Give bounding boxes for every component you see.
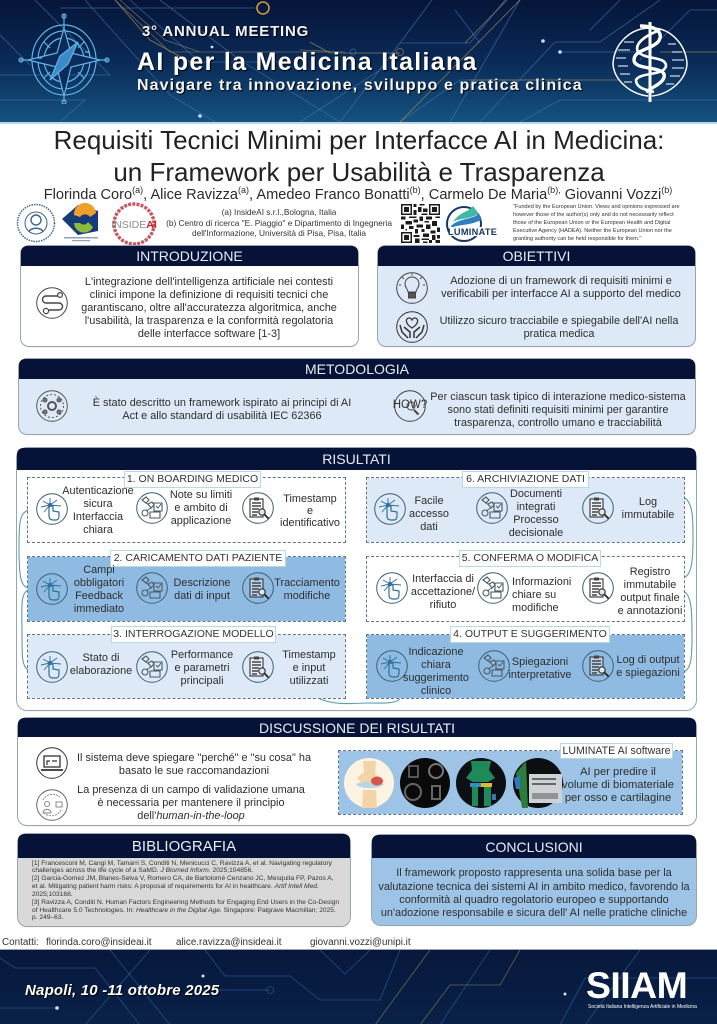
funding disclaimer: those of the European Union or the European Health and Digital bbox=[513, 220, 670, 226]
step 6 text c bbox=[622, 496, 674, 522]
meeting label: 3° ANNUAL MEETING bbox=[142, 23, 309, 40]
conclusion text: Il framework proposto rappresenta una solida base per la bbox=[396, 867, 672, 879]
discussion text 2 bbox=[77, 784, 305, 822]
footer banner bbox=[0, 949, 717, 1024]
panel: introduzione bbox=[21, 246, 358, 346]
step 1 text c: Timestamp bbox=[283, 492, 337, 504]
step 4 text a: suggerimento bbox=[403, 672, 469, 684]
software description: AI per predire il bbox=[580, 766, 656, 778]
panel: risultati bbox=[17, 448, 696, 710]
intro text: garantiscano, oltre all'accuratezza algoritmica, anche bbox=[81, 302, 337, 314]
references: et al. Mitigating patient harm risks: A proposal of requirements for AI in healthcare. Artif Intell Med. bbox=[32, 883, 319, 890]
step 1 text b: e ambito di bbox=[174, 502, 228, 514]
references: [3] Ravizza A, Conditi N. Human Factors Engineering Methods for Engaging End Users in the Co-Design bbox=[32, 899, 339, 906]
3D segmented model bbox=[456, 758, 506, 808]
logo: research centre bbox=[62, 203, 98, 242]
main title: Requisiti Tecnici Minimi per Interfacce AI in Medicina: bbox=[54, 125, 664, 155]
step 6 text b: integrati bbox=[517, 500, 555, 512]
icon: flow bbox=[477, 572, 509, 604]
method text 1: È stato descritto un framework ispirato ai principi di AI bbox=[93, 396, 351, 408]
software description: volume di biomateriale bbox=[562, 778, 674, 790]
objective 2 text: pratica medica bbox=[524, 328, 594, 340]
step 6 label: 6. ARCHIVIAZIONE DATI bbox=[466, 473, 585, 485]
references bbox=[32, 860, 339, 922]
step 5 text c: e annotazioni bbox=[618, 604, 682, 616]
method text 2: trasparenza, controllo umano e tracciabilità bbox=[454, 416, 662, 428]
step 1 text c: identificativo bbox=[280, 516, 340, 528]
funding disclaimer bbox=[513, 204, 680, 242]
step 5 text b: modifiche bbox=[512, 602, 559, 614]
affiliations: dell'Informazione, Università di Pisa, Pisa, Italia bbox=[192, 228, 366, 238]
heading: discussione: DISCUSSIONE DEI RISULTATI bbox=[259, 720, 455, 736]
discussion text 2: è necessaria per mantenere il principio bbox=[97, 796, 285, 808]
step 4 label: 4. OUTPUT E SUGGERIMENTO bbox=[453, 628, 607, 640]
icon: pathway bbox=[36, 287, 68, 319]
step 4 text a: chiara bbox=[421, 658, 451, 670]
icon: touch bbox=[36, 573, 68, 605]
icon: flow bbox=[476, 492, 508, 524]
step 2 text a: immediato bbox=[74, 602, 124, 614]
funding disclaimer: however those of the author(s) only and do not necessarily reflect bbox=[513, 212, 674, 218]
references: challenges across the life cycle of a SaMD. J Biomed Inform. 2025;104856. bbox=[32, 867, 253, 874]
references: [1] Francesconi M, Cangi M, Tamarri S, Conditi N, Menicucci C, Ravizza A, et al. Navigating regulatory bbox=[32, 860, 332, 866]
step 3 text c: Timestamp bbox=[282, 648, 336, 660]
icon: hands and heart bbox=[396, 311, 428, 343]
contacts: alice.ravizza@insideai.it bbox=[176, 937, 282, 948]
step 5 text c: Registro bbox=[630, 566, 670, 578]
step 3 text b: principali bbox=[181, 674, 223, 686]
software label: LUMINATE AI software bbox=[562, 745, 671, 757]
step 2 text b bbox=[174, 576, 230, 602]
contacts: Contatti: bbox=[2, 937, 39, 948]
step 3 text b bbox=[171, 648, 233, 686]
authors: Florinda Coro(a), Alice Ravizza(a), Amedeo Franco Bonatti(b), Carmelo De Maria(b), Giovanni Vozzi(b) bbox=[44, 185, 672, 203]
discussion text 1: Il sistema deve spiegare "perché" e "su cosa" ha bbox=[77, 752, 311, 764]
conclusion text: conformità al quadro regolatorio europeo e supportando bbox=[399, 894, 669, 906]
heading: risultati bbox=[17, 448, 696, 470]
step 4 text a: Indicazione bbox=[408, 646, 464, 658]
step 6 text b: Processo bbox=[513, 514, 559, 526]
step 4 text b: interpretative bbox=[509, 668, 571, 680]
logo: university seal bbox=[16, 204, 56, 242]
intro text: clinici impone la definizione di requisiti tecnici che bbox=[90, 288, 328, 300]
step 6 text a: dati bbox=[420, 520, 438, 532]
step 2 text c: modifiche bbox=[284, 590, 330, 602]
heading: metodologia bbox=[19, 359, 695, 379]
heading: introduzione: INTRODUZIONE bbox=[136, 248, 243, 264]
icon: flow bbox=[136, 651, 168, 683]
step 5 text a bbox=[411, 572, 475, 612]
intro text: L'integrazione dell'intelligenza artificiale nei contesti bbox=[85, 276, 333, 288]
heading: conclusioni bbox=[372, 835, 696, 858]
objective 1 text: verificabili per interfacce AI a supporto del medico bbox=[441, 288, 681, 300]
icon: light bulb bbox=[396, 272, 428, 304]
CT scan bbox=[400, 758, 450, 808]
step 2 text a: obbligatori bbox=[74, 576, 124, 588]
SIIAM tagline: Società Italiana Intelligenza Artificiale in Medicina bbox=[588, 1004, 697, 1010]
icon: laptop bbox=[36, 747, 68, 779]
logo: Luminate: LUMINATE bbox=[448, 227, 497, 237]
intro text bbox=[81, 276, 337, 340]
discussion text 1 bbox=[77, 752, 311, 778]
icon: flow bbox=[478, 650, 510, 682]
step 2 text c: Tracciamento bbox=[274, 576, 340, 588]
step 4 text b: Spiegazioni bbox=[512, 656, 568, 668]
references: 2025;103168. bbox=[32, 891, 73, 898]
step 1 text a bbox=[62, 484, 134, 536]
heading: metodologia: METODOLOGIA bbox=[305, 361, 409, 377]
logo: Luminate bbox=[446, 206, 497, 242]
method text 1: Act e allo standard di usabilità IEC 62366 bbox=[122, 410, 322, 422]
step 1 text c: e bbox=[307, 504, 313, 516]
conclusion text bbox=[378, 867, 690, 920]
icon: flow bbox=[136, 492, 168, 524]
discussion text 1: basato le sue raccomandazioni bbox=[119, 764, 269, 776]
panel: conclusioni bbox=[372, 835, 696, 925]
heading: conclusioni: CONCLUSIONI bbox=[485, 839, 583, 855]
step 1 text b bbox=[170, 488, 232, 526]
luminate software panel bbox=[339, 751, 682, 814]
icon: compass logo bbox=[18, 13, 110, 104]
icon: document bbox=[242, 572, 274, 604]
step 5 text b bbox=[512, 576, 571, 614]
step 3 text b: Performance bbox=[171, 648, 233, 660]
header circuit lines bbox=[0, 0, 717, 122]
funding disclaimer: granting authority can be held responsible for them." bbox=[513, 236, 641, 242]
panel: obiettivi bbox=[378, 246, 695, 346]
step 5 text c bbox=[618, 566, 682, 618]
method text 1 bbox=[93, 396, 351, 422]
logo: InsideAI: INSIDEAI bbox=[111, 219, 157, 231]
icon: document bbox=[582, 650, 614, 682]
icon: document bbox=[242, 651, 274, 683]
references: [2] Garcia-Gomez JM, Blanes-Selva V, Romero CA, de Bartolomé Cenzano JC, Mesquita FP, Pazos A, bbox=[32, 875, 334, 882]
icon: document bbox=[582, 492, 614, 524]
icon: touch bbox=[374, 493, 406, 525]
volume result view bbox=[512, 758, 564, 808]
objective 2 text: Utilizzo sicuro tracciabile e spiegabile dell'AI nella bbox=[440, 314, 678, 326]
icon: how magnifier: HOW? bbox=[393, 399, 427, 411]
objective 1 text: Adozione di un framework di requisiti minimi e bbox=[450, 274, 672, 286]
conclusion text: un'adozione responsabile e sicura dell' AI nelle pratiche cliniche bbox=[381, 907, 687, 919]
software description bbox=[562, 766, 674, 804]
step 4 text c bbox=[616, 654, 680, 680]
step 4: output e suggerimento bbox=[367, 635, 684, 698]
step 1 text c bbox=[280, 492, 340, 528]
step 1 label: 1. ON BOARDING MEDICO bbox=[127, 473, 258, 485]
panel: metodologia bbox=[19, 359, 695, 434]
step 6 text b bbox=[509, 488, 563, 540]
SIIAM logo bbox=[586, 967, 691, 1011]
icon: touch bbox=[376, 572, 408, 604]
step 5 text a: accettazione/ bbox=[411, 586, 475, 598]
step 1 text b: Note su limiti bbox=[170, 488, 232, 500]
intro text: l'usabilità, la trasparenza e la conformità regolatoria bbox=[85, 314, 333, 326]
heading: obiettivi bbox=[378, 246, 695, 266]
heading: risultati: RISULTATI bbox=[322, 451, 391, 467]
logo: InsideAI bbox=[111, 202, 157, 245]
header banner bbox=[0, 0, 717, 124]
icon: touch bbox=[36, 493, 68, 525]
step 3 text c: utilizzati bbox=[290, 674, 328, 686]
step 5 text b: Informazioni bbox=[512, 576, 571, 588]
contacts: florinda.coro@insideai.it bbox=[46, 937, 152, 948]
step 2: caricamento dati paziente bbox=[28, 557, 345, 621]
method text 2: Per ciascun task tipico di interazione medico-sistema bbox=[430, 390, 686, 402]
step 6 text c: Log bbox=[639, 496, 657, 508]
step 1 text a: sicura bbox=[83, 498, 113, 510]
icon: document bbox=[582, 572, 614, 604]
main title bbox=[54, 125, 664, 187]
step 3 text a: Stato di bbox=[83, 652, 119, 664]
step 4 text a bbox=[403, 646, 469, 698]
heading: introduzione bbox=[21, 246, 358, 266]
step 5 text c: output finale bbox=[620, 592, 680, 604]
step 5 text a: rifiuto bbox=[430, 598, 456, 610]
icon: gears bbox=[36, 390, 68, 422]
step 1 text a: Interfaccia bbox=[73, 510, 123, 522]
conference subtitle: Navigare tra innovazione, sviluppo e pratica clinica bbox=[137, 77, 583, 94]
step 3 text a bbox=[70, 652, 132, 676]
step 4 text b bbox=[509, 656, 571, 682]
icon: document bbox=[242, 492, 274, 524]
funding disclaimer: "Funded by the European Union. Views and opinions expressed are bbox=[513, 204, 680, 210]
step 6 text b: decisionale bbox=[509, 526, 563, 538]
step 4 text c: Log di output bbox=[617, 654, 679, 666]
step 6: archiviazione dati bbox=[367, 478, 684, 542]
knee illustration bbox=[344, 758, 394, 808]
icon: caduceus logo bbox=[612, 22, 688, 102]
heading: bibliografia: BIBLIOGRAFIA bbox=[132, 838, 236, 855]
step 2 label: 2. CARICAMENTO DATI PAZIENTE bbox=[114, 552, 282, 564]
heading: obiettivi: OBIETTIVI bbox=[503, 248, 570, 264]
objective 1 text bbox=[441, 274, 681, 300]
footer circuit lines bbox=[0, 950, 717, 1024]
QR code bbox=[401, 204, 440, 243]
heading: bibliografia bbox=[18, 834, 350, 858]
conference title: AI per la Medicina Italiana bbox=[137, 48, 478, 76]
panel: discussione dei risultati bbox=[18, 718, 696, 825]
step 3 text c bbox=[282, 648, 336, 688]
icon: touch bbox=[376, 650, 408, 682]
funding disclaimer: Executive Agency (HADEA). Neither the European Union nor the bbox=[513, 228, 672, 234]
conclusion text: valutazione tecnica dei sistemi AI in ambito medico, favorendo la bbox=[378, 881, 690, 893]
date and place: Napoli, 10 -11 ottobre 2025 bbox=[25, 982, 219, 999]
step 3: interrogazione modello bbox=[28, 635, 345, 698]
step 3 text c: e input bbox=[293, 662, 325, 674]
affiliations: (b) Centro di ricerca "E. Piaggio" e Dipartimento di Ingegneria bbox=[166, 218, 392, 228]
step 2 text a: Campi bbox=[83, 564, 115, 576]
intro text: delle interfacce software [1-3] bbox=[138, 328, 280, 340]
icon: flow bbox=[136, 572, 168, 604]
step 5: conferma o modifica bbox=[367, 557, 684, 621]
main title: un Framework per Usabilità e Trasparenza bbox=[113, 157, 605, 187]
affiliations: (a) InsideAI s.r.l.,Bologna, Italia bbox=[222, 207, 336, 217]
heading: discussione bbox=[18, 718, 696, 737]
step 6 text a bbox=[409, 494, 449, 534]
step 2 text b: Descrizione bbox=[174, 576, 230, 588]
step 3 text a: elaborazione bbox=[70, 664, 132, 676]
step 1 text a: chiara bbox=[83, 524, 113, 536]
software description: per osso e cartilagine bbox=[565, 792, 671, 804]
step 2 text a bbox=[74, 564, 124, 614]
step 2 text a: Feedback bbox=[75, 590, 123, 602]
step 2 text b: dati di input bbox=[174, 590, 230, 602]
references: of Healthcare 5.0 Technologies. In: Healthcare in the Digital Age. Singapore: Palgrave Macmillan; 2025. bbox=[32, 907, 336, 914]
discussion text 2: La presenza di un campo di validazione umana bbox=[77, 784, 305, 796]
step 5 text a: Interfaccia di bbox=[412, 572, 474, 584]
step 6 text a: Facile bbox=[414, 494, 444, 506]
step 5 text b: chiare su bbox=[512, 588, 556, 600]
affiliations bbox=[166, 207, 392, 238]
discussion text 2: dell'human-in-the-loop bbox=[137, 810, 245, 822]
objective 2 text bbox=[440, 314, 678, 340]
panel: bibliografia bbox=[18, 834, 350, 926]
contacts: giovanni.vozzi@unipi.it bbox=[310, 937, 411, 948]
icon: human in the loop bbox=[36, 789, 68, 821]
references: p. 249–63. bbox=[32, 914, 63, 921]
icon: touch bbox=[36, 651, 68, 683]
step 2 text c bbox=[274, 576, 340, 602]
method text 2 bbox=[430, 390, 686, 428]
icon: how magnifier bbox=[393, 390, 427, 422]
step 5 text c: immutabile bbox=[624, 578, 676, 590]
step 1 text b: applicazione bbox=[171, 514, 231, 526]
step 4 text c: e spiegazioni bbox=[616, 666, 680, 678]
SIIAM wordmark: SIIAM bbox=[586, 965, 687, 1006]
step 6 text b: Documenti bbox=[510, 488, 562, 500]
step 5 label: 5. CONFERMA O MODIFICA bbox=[462, 552, 598, 564]
method text 2: sono stati definiti requisiti minimi per garantire bbox=[448, 404, 668, 416]
step 3 label: 3. INTERROGAZIONE MODELLO bbox=[113, 628, 274, 640]
step 4 text a: clinico bbox=[421, 684, 451, 696]
step 6 text c: immutabile bbox=[622, 508, 674, 520]
workflow connectors bbox=[18, 498, 694, 704]
step 6 text a: accesso bbox=[409, 508, 449, 520]
step 1: on boarding medico bbox=[27, 471, 346, 543]
step 1 text a: Autenticazione bbox=[62, 484, 134, 496]
step 3 text b: e parametri bbox=[174, 662, 230, 674]
contacts bbox=[0, 936, 420, 949]
